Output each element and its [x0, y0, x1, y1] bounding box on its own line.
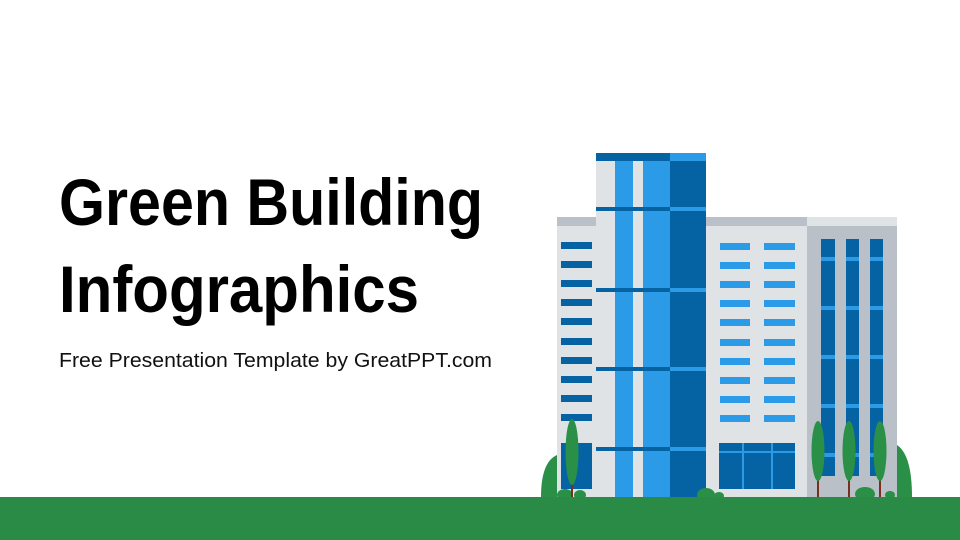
trees: [566, 419, 886, 497]
title: Infographics: [59, 252, 419, 326]
subtitle: Free Presentation Template by GreatPPT.com: [59, 350, 492, 372]
title: [59, 165, 483, 326]
door: [719, 443, 795, 489]
building: right: [807, 217, 897, 497]
building: left: [557, 217, 596, 497]
building: middle: [706, 217, 807, 497]
bushes: [541, 445, 912, 502]
ground: [0, 497, 960, 540]
title: Green Building: [59, 165, 483, 239]
building: tower: [596, 153, 706, 497]
